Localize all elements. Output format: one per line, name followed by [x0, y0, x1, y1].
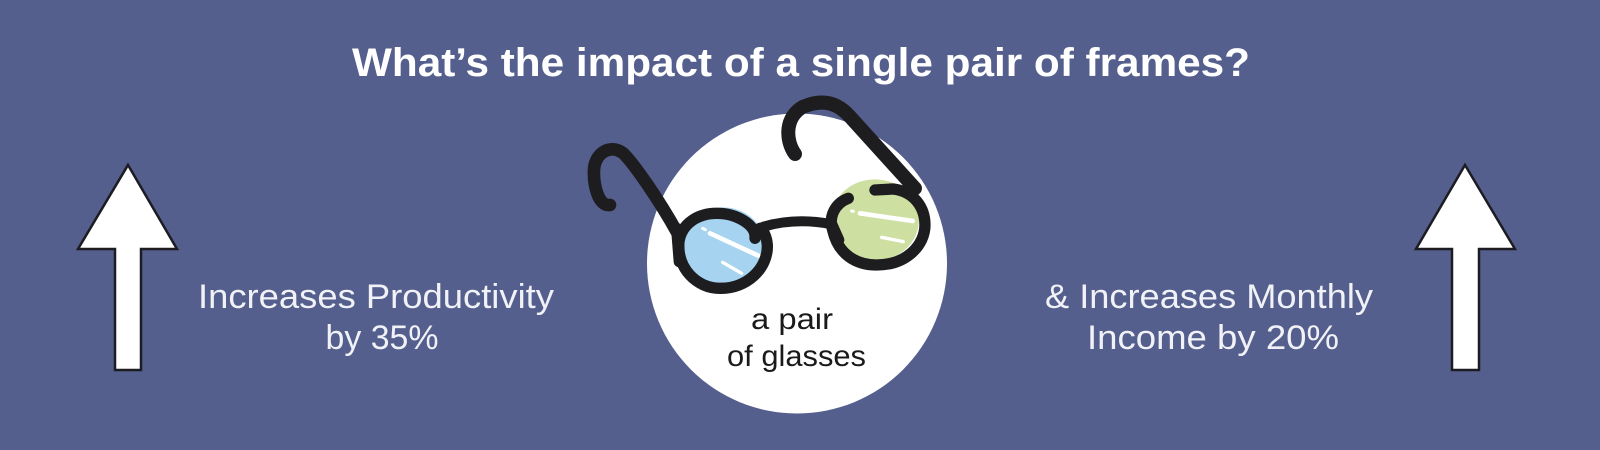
circle label: of glasses: [727, 340, 866, 373]
white circle: [647, 114, 947, 414]
text: monthly income: [1045, 278, 1373, 357]
text: productivity: by 35%: [326, 319, 438, 357]
icon: right up arrow: [1416, 165, 1515, 370]
icon: glasses: [594, 103, 925, 293]
circle label: a pair: [751, 303, 833, 336]
left lens: [680, 207, 767, 293]
text: monthly income: Income by 20%: [1087, 319, 1339, 357]
title: What’s the impact of a single pair of frames?: [352, 41, 1250, 85]
text: productivity: Increases Productivity: [198, 278, 554, 316]
right lens: [831, 179, 919, 261]
text: monthly income: & Increases Monthly: [1045, 278, 1373, 316]
text: productivity: [198, 278, 554, 357]
icon: left up arrow: [78, 165, 177, 370]
frame: [594, 103, 925, 288]
lens highlights: [703, 211, 913, 273]
circle label: [727, 303, 866, 373]
